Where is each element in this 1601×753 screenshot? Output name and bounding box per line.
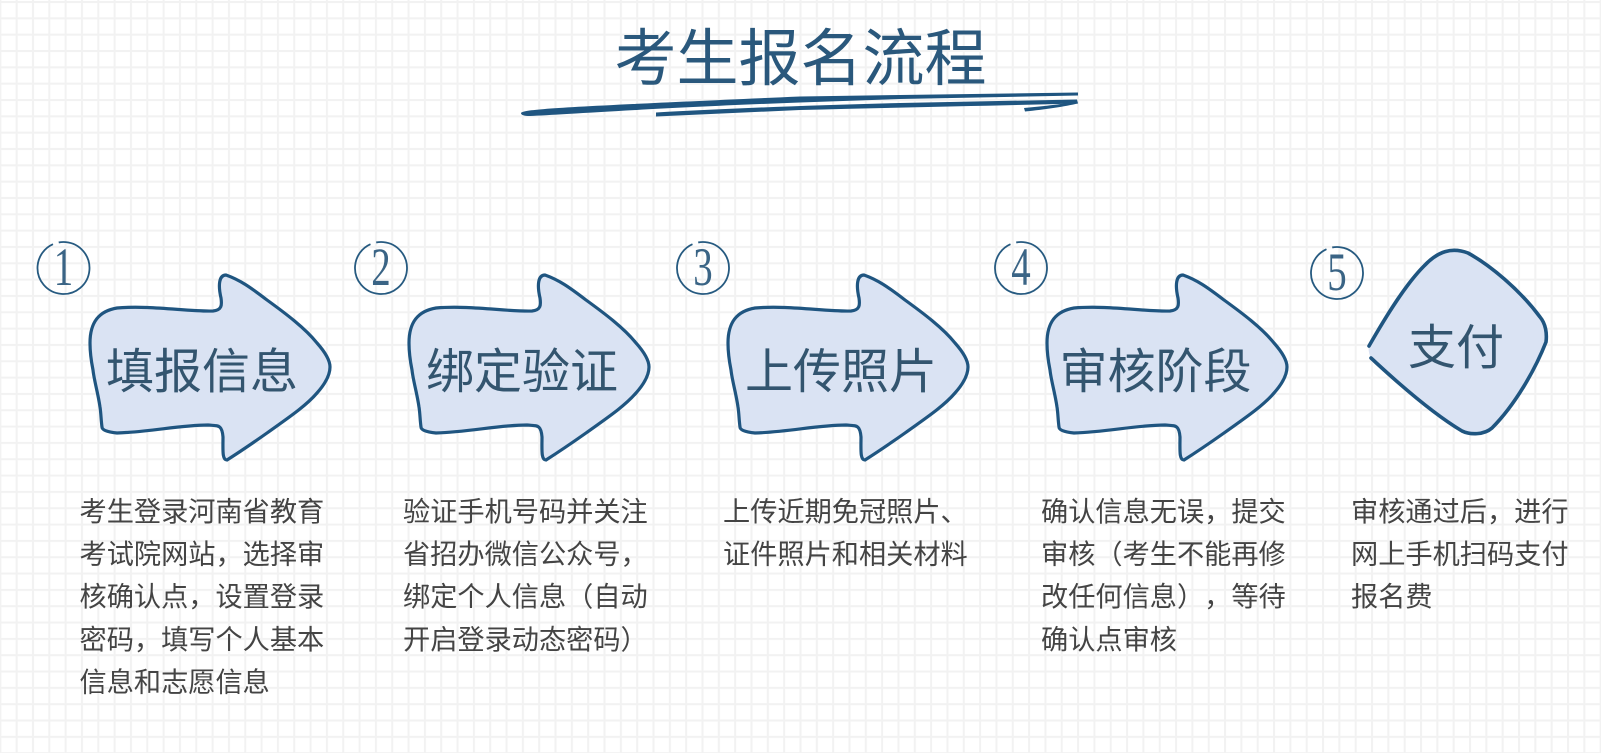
- number 1: [35, 238, 92, 298]
- text 5: 网上手机扫码支付: [1351, 539, 1569, 570]
- text 4: 审核（考生不能再修: [1041, 539, 1286, 570]
- step 3: [675, 238, 968, 570]
- number 2: 2: [371, 238, 391, 298]
- arrow 2: [409, 275, 649, 460]
- text 5: 审核通过后，进行: [1351, 496, 1569, 527]
- text 3: 证件照片和相关材料: [723, 539, 968, 570]
- number 4: [993, 238, 1049, 298]
- number 4: 4: [1011, 238, 1031, 298]
- number 1: 1: [54, 238, 73, 298]
- label 2: 绑定验证: [426, 346, 618, 399]
- arrow 3: [728, 275, 968, 460]
- text 1: 考生登录河南省教育: [80, 496, 324, 527]
- text 2: 开启登录动态密码）: [403, 624, 648, 655]
- number 2: [353, 238, 409, 298]
- label 1: 填报信息: [106, 346, 298, 399]
- title brush underline: [521, 92, 1078, 116]
- number 3: [675, 238, 731, 298]
- text 2: 省招办微信公众号，: [403, 539, 648, 570]
- number 5: [1309, 243, 1365, 303]
- text 1: 考试院网站，选择审: [80, 539, 324, 570]
- text 3: 上传近期免冠照片、: [723, 496, 968, 527]
- arrow 1: [90, 275, 330, 460]
- label 5: 支付: [1408, 322, 1504, 375]
- text 4: 确认信息无误，提交: [1041, 496, 1286, 527]
- text 2: 绑定个人信息（自动: [403, 581, 648, 612]
- arrow 4: [1047, 275, 1287, 460]
- text 5: 报名费: [1351, 581, 1433, 612]
- label 3: 上传照片: [745, 346, 937, 399]
- diamond: [1369, 250, 1546, 434]
- text 4: 改任何信息），等待: [1041, 581, 1286, 612]
- step 2: [353, 238, 649, 655]
- text 2: 验证手机号码并关注: [403, 496, 648, 527]
- text 1: 信息和志愿信息: [80, 666, 270, 697]
- step 4: [993, 238, 1287, 655]
- text 4: 确认点审核: [1041, 624, 1177, 655]
- number 5: 5: [1327, 243, 1347, 303]
- number 3: 3: [693, 238, 713, 298]
- label 4: 审核阶段: [1060, 346, 1252, 399]
- text 1: 密码，填写个人基本: [80, 624, 324, 655]
- step 5: [1309, 243, 1569, 612]
- title: 考生报名流程: [614, 25, 987, 94]
- step 1: [35, 238, 330, 697]
- text 1: 核确认点，设置登录: [80, 581, 324, 612]
